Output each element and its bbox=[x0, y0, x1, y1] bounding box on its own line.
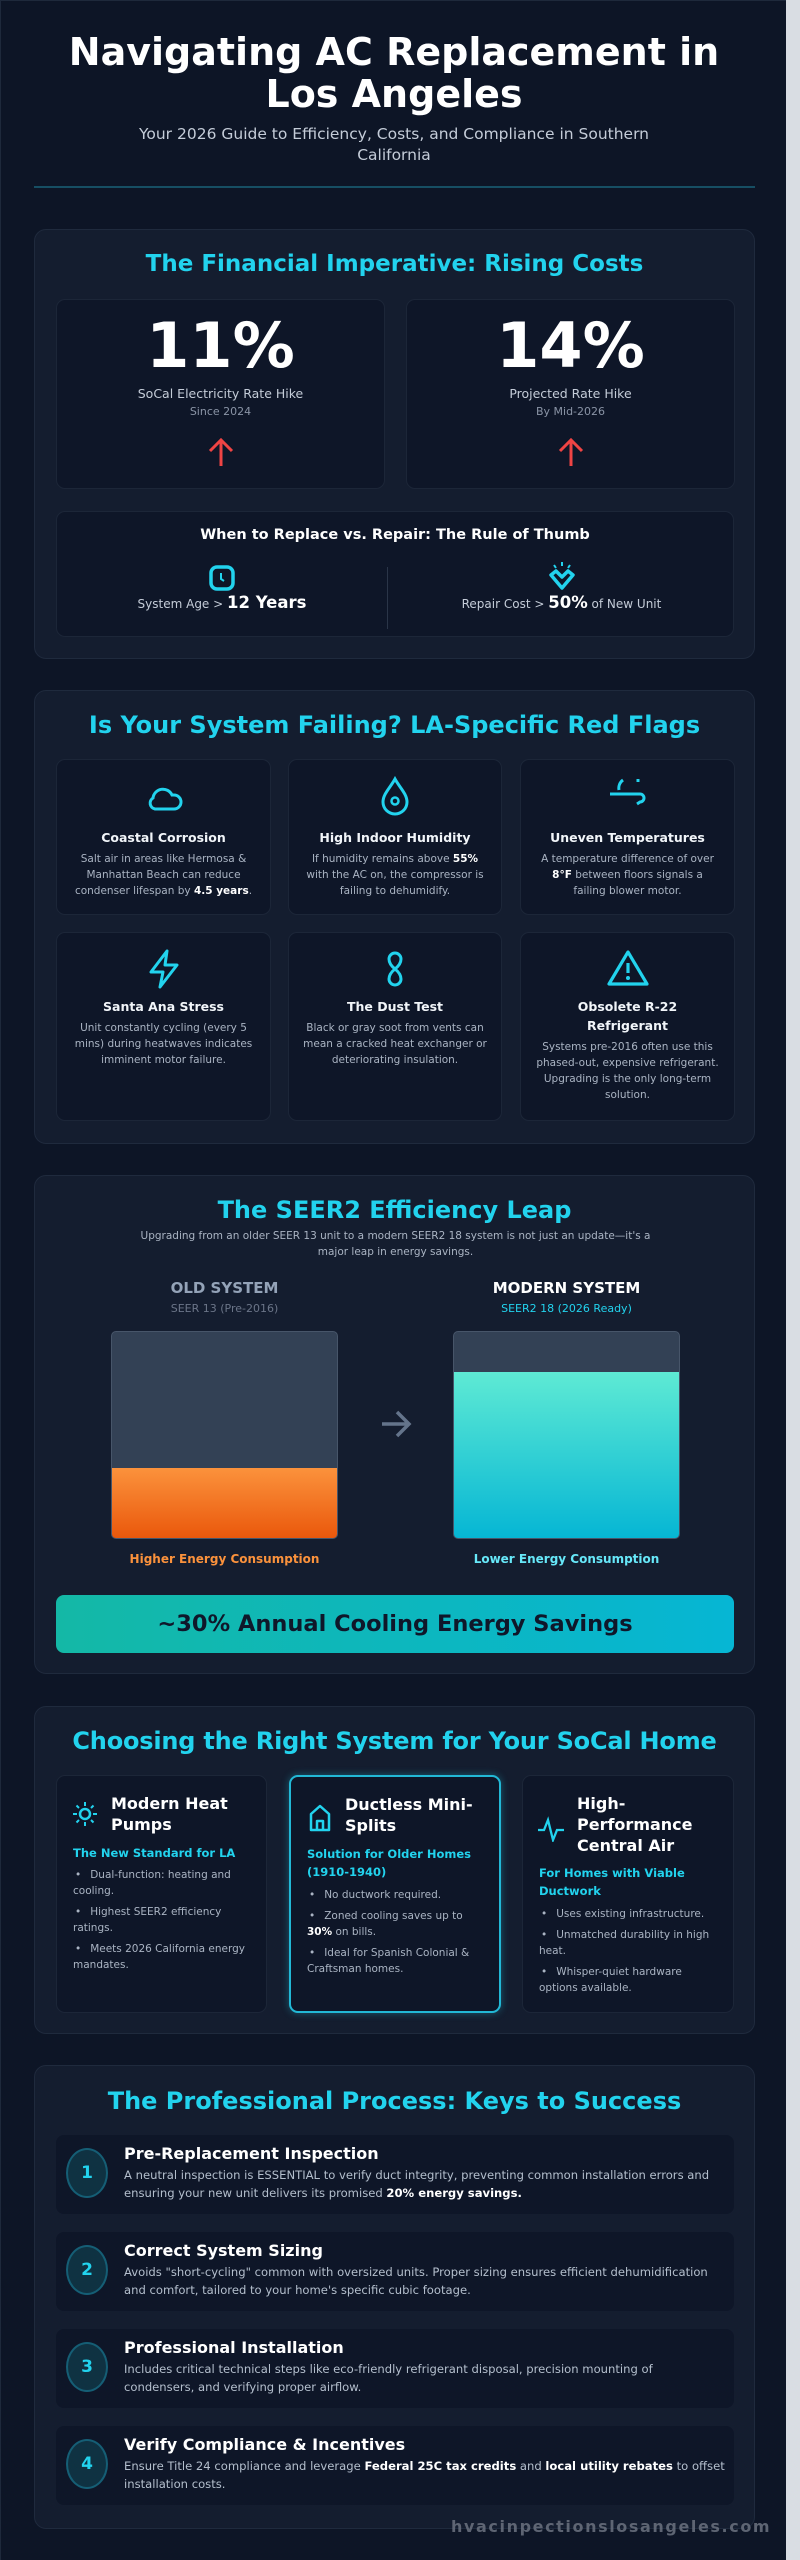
modern system column: Lower Energy Consumption bbox=[474, 1552, 659, 1566]
card: dust test: Black or gray soot from vents can mean a cracked heat exchanger or deteriorating insulation. bbox=[303, 1022, 487, 1066]
step 3: Professional Installation bbox=[124, 2338, 344, 2357]
card: ductless (highlighted) bbox=[289, 1775, 501, 2013]
card: heat pumps: Meets 2026 California energy mandates. bbox=[73, 1943, 245, 1971]
step 2 bbox=[56, 2232, 734, 2311]
step 3 bbox=[56, 2329, 734, 2408]
title: Navigating AC Replacement in bbox=[69, 30, 719, 74]
card: heat pumps bbox=[56, 1775, 267, 2013]
step 2: Avoids "short-cycling" common with oversized units. Proper sizing ensures efficient dehumidification and comfort, tailored to your home's specific cubic footage. bbox=[124, 2265, 708, 2297]
card: ductless (highlighted): Zoned cooling saves up to 30% on bills. bbox=[307, 1910, 463, 1938]
card: R-22: Obsolete R-22 bbox=[578, 999, 677, 1014]
card: santa ana: Unit constantly cycling (every 5 mins) during heatwaves indicates imminent motor failure. bbox=[75, 1022, 252, 1066]
savings banner bbox=[56, 1595, 734, 1653]
card: coastal corrosion bbox=[56, 759, 271, 915]
modern system column bbox=[453, 1279, 680, 1566]
card: santa ana: Santa Ana Stress bbox=[103, 999, 224, 1014]
card: heat pumps: The New Standard for LA bbox=[73, 1846, 235, 1860]
icon: up arrow bbox=[209, 438, 233, 466]
stat card: 14%: By Mid-2026 bbox=[536, 405, 605, 418]
rule of thumb card bbox=[56, 511, 734, 637]
stat card: 11% bbox=[56, 299, 385, 489]
panel: red flags bbox=[34, 690, 755, 1144]
step 1 bbox=[56, 2135, 734, 2214]
card: ductless (highlighted): No ductwork required. bbox=[324, 1889, 441, 1901]
card: central air: Whisper-quiet hardware options available. bbox=[539, 1966, 682, 1994]
card: R-22: Systems pre-2016 often use this phased-out, expensive refrigerant. Upgrading is the only long-term solution. bbox=[536, 1041, 719, 1101]
icon: up arrow bbox=[559, 438, 583, 466]
step 2: Correct System Sizing bbox=[124, 2241, 323, 2260]
rule of thumb card: When to Replace vs. Repair: The Rule of Thumb bbox=[200, 527, 590, 543]
title: Los Angeles bbox=[265, 72, 523, 116]
icon: arrow right bbox=[382, 1410, 412, 1438]
title bbox=[69, 30, 719, 116]
card: humidity bbox=[288, 759, 502, 915]
step 1: 1 bbox=[81, 2163, 93, 2183]
heading: SEER2: The SEER2 Efficiency Leap bbox=[218, 1196, 571, 1224]
bar: old bbox=[111, 1331, 338, 1539]
watermark: hvacinpectionslosangeles.com bbox=[451, 2517, 771, 2536]
stat card: 11%: Since 2024 bbox=[190, 405, 251, 418]
panel: financial imperative bbox=[34, 229, 755, 659]
rule: repair cost: Repair Cost > 50% of New Unit bbox=[462, 593, 661, 612]
card: ductless (highlighted): Solution for Older Homes (1910-1940) bbox=[307, 1847, 471, 1879]
card: central air bbox=[522, 1775, 734, 2013]
card: heat pumps: Highest SEER2 efficiency ratings. bbox=[73, 1906, 221, 1934]
card: humidity: If humidity remains above 55% with the AC on, the compressor is failing to dehumidify. bbox=[306, 853, 484, 897]
savings banner: ~30% Annual Cooling Energy Savings bbox=[157, 1611, 633, 1637]
card: R-22: Refrigerant bbox=[587, 1018, 668, 1033]
step 1: A neutral inspection is ESSENTIAL to verify duct integrity, preventing common installation errors and ensuring your new unit delivers its promised 20% energy savings. bbox=[124, 2168, 709, 2200]
old system column: Higher Energy Consumption bbox=[130, 1552, 319, 1566]
heading: choosing: Choosing the Right System for Your SoCal Home bbox=[72, 1727, 717, 1755]
rule: system age: System Age > 12 Years bbox=[138, 593, 306, 612]
rule: system age bbox=[138, 565, 306, 612]
card: central air: Unmatched durability in high heat. bbox=[539, 1929, 709, 1957]
card: ductless (highlighted): Splits bbox=[345, 1816, 396, 1835]
intro text: Upgrading from an older SEER 13 unit to a modern SEER2 18 system is not just an update—it's a major leap in energy savings. bbox=[141, 1230, 650, 1258]
card: uneven temperatures: Uneven Temperatures bbox=[550, 830, 705, 845]
card: santa ana bbox=[56, 932, 271, 1121]
bar: modern bbox=[453, 1331, 680, 1539]
step 1: Pre-Replacement Inspection bbox=[124, 2144, 379, 2163]
card: dust test: The Dust Test bbox=[347, 999, 443, 1014]
card: central air: Uses existing infrastructure. bbox=[556, 1908, 704, 1920]
step 3: Includes critical technical steps like eco-friendly refrigerant disposal, precision mounting of condensers, and verifying proper airflow. bbox=[124, 2362, 653, 2394]
stat card: 11%: 11% bbox=[146, 309, 295, 382]
card: ductless (highlighted): Ideal for Spanish Colonial & Craftsman homes. bbox=[307, 1947, 469, 1975]
card: central air: Performance bbox=[577, 1815, 693, 1834]
heading: red flags: Is Your System Failing? LA-Specific Red Flags bbox=[89, 711, 700, 739]
old system column: OLD SYSTEM bbox=[171, 1279, 278, 1297]
card: uneven temperatures bbox=[520, 759, 735, 915]
subtitle: Your 2026 Guide to Efficiency, Costs, and Compliance in Southern California bbox=[139, 125, 649, 164]
old system column: SEER 13 (Pre-2016) bbox=[171, 1302, 278, 1315]
card: R-22 bbox=[520, 932, 735, 1121]
card: central air: Central Air bbox=[577, 1836, 674, 1855]
modern system column: SEER2 18 (2026 Ready) bbox=[501, 1302, 632, 1315]
card: coastal corrosion: Salt air in areas like Hermosa & Manhattan Beach can reduce condenser lifespan by 4.5 years. bbox=[75, 853, 252, 897]
old system column bbox=[111, 1279, 338, 1566]
step 4: 4 bbox=[81, 2454, 93, 2474]
card: ductless (highlighted): Ductless Mini- bbox=[345, 1795, 473, 1814]
heading: financial: The Financial Imperative: Rising Costs bbox=[146, 251, 643, 277]
step 4 bbox=[56, 2426, 734, 2505]
card: heat pumps: Modern Heat bbox=[111, 1794, 228, 1813]
card: uneven temperatures: A temperature difference of over 8°F between floors signals a failing blower motor. bbox=[541, 853, 714, 897]
card: dust test bbox=[288, 932, 502, 1121]
step 4: Ensure Title 24 compliance and leverage Federal 25C tax credits and local utility rebates to offset installation costs. bbox=[124, 2459, 725, 2491]
stat card: 14% bbox=[406, 299, 735, 489]
card: heat pumps: Pumps bbox=[111, 1815, 172, 1834]
panel: choosing system bbox=[34, 1706, 755, 2034]
card: central air: For Homes with Viable Ductwork bbox=[539, 1866, 685, 1898]
stat card: 11%: SoCal Electricity Rate Hike bbox=[138, 386, 303, 401]
step 4: Verify Compliance & Incentives bbox=[124, 2435, 405, 2454]
step 3: 3 bbox=[81, 2357, 93, 2377]
card: central air: High- bbox=[577, 1794, 625, 1813]
card: heat pumps: Dual-function: heating and cooling. bbox=[73, 1869, 231, 1897]
panel: professional process bbox=[34, 2065, 755, 2529]
panel: SEER2 bbox=[34, 1175, 755, 1674]
stat card: 14%: Projected Rate Hike bbox=[509, 386, 632, 401]
step 2: 2 bbox=[81, 2260, 93, 2280]
rule: repair cost bbox=[462, 562, 662, 612]
stat card: 14%: 14% bbox=[496, 309, 645, 382]
heading: process: The Professional Process: Keys to Success bbox=[108, 2087, 681, 2115]
card: coastal corrosion: Coastal Corrosion bbox=[101, 830, 226, 845]
modern system column: MODERN SYSTEM bbox=[493, 1279, 640, 1297]
card: humidity: High Indoor Humidity bbox=[319, 830, 471, 845]
